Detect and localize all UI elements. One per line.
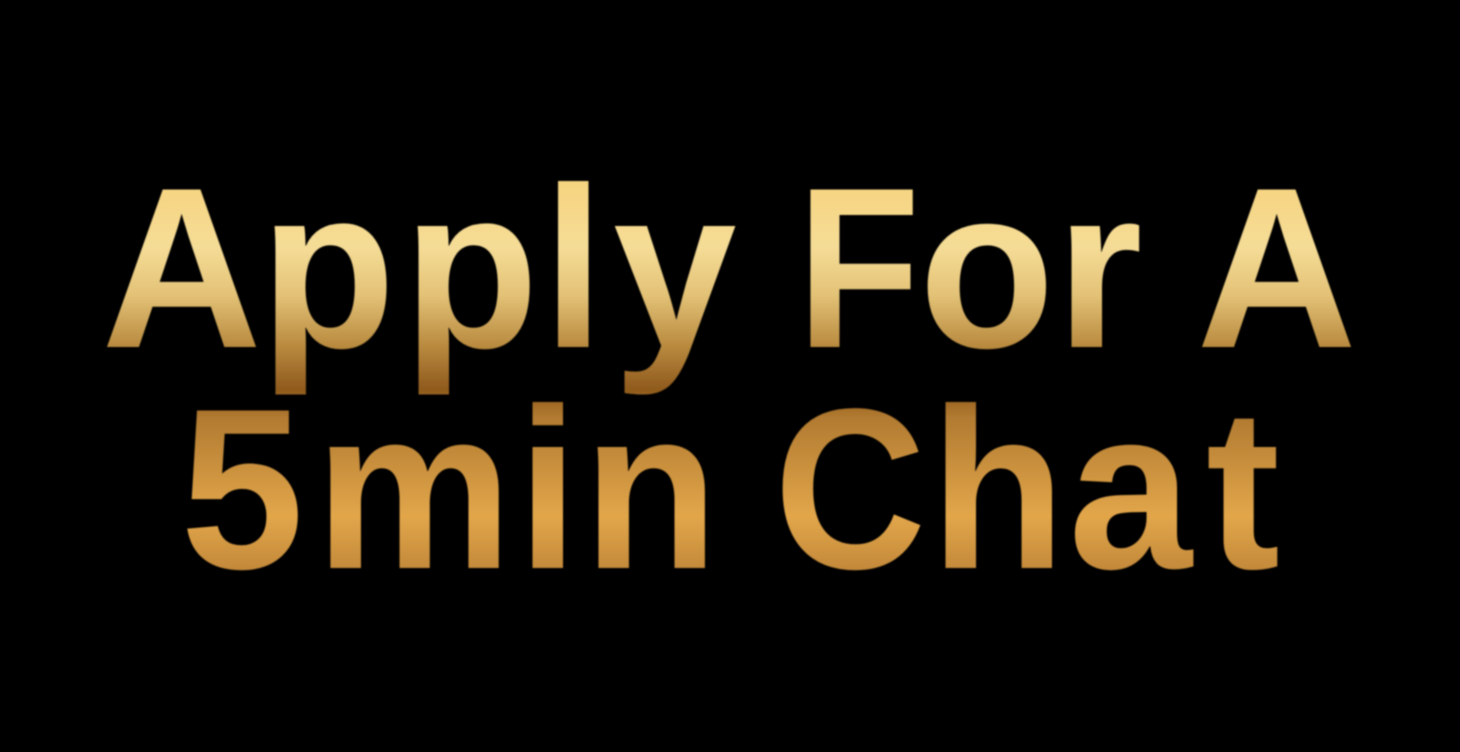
title: 5min Chat: 5min: [180, 361, 719, 617]
title: 5min Chat: hat: [930, 361, 1280, 617]
title: 5min Chat: C: [774, 361, 926, 617]
title: Apply For A: [101, 140, 1357, 396]
title: Apply For A: Apply: [101, 140, 737, 396]
title: Apply For A: A: [1196, 140, 1357, 396]
title: Apply For A: or: [919, 140, 1142, 396]
title: 5min Chat: [180, 361, 1280, 617]
title: Apply For A: F: [797, 140, 920, 396]
